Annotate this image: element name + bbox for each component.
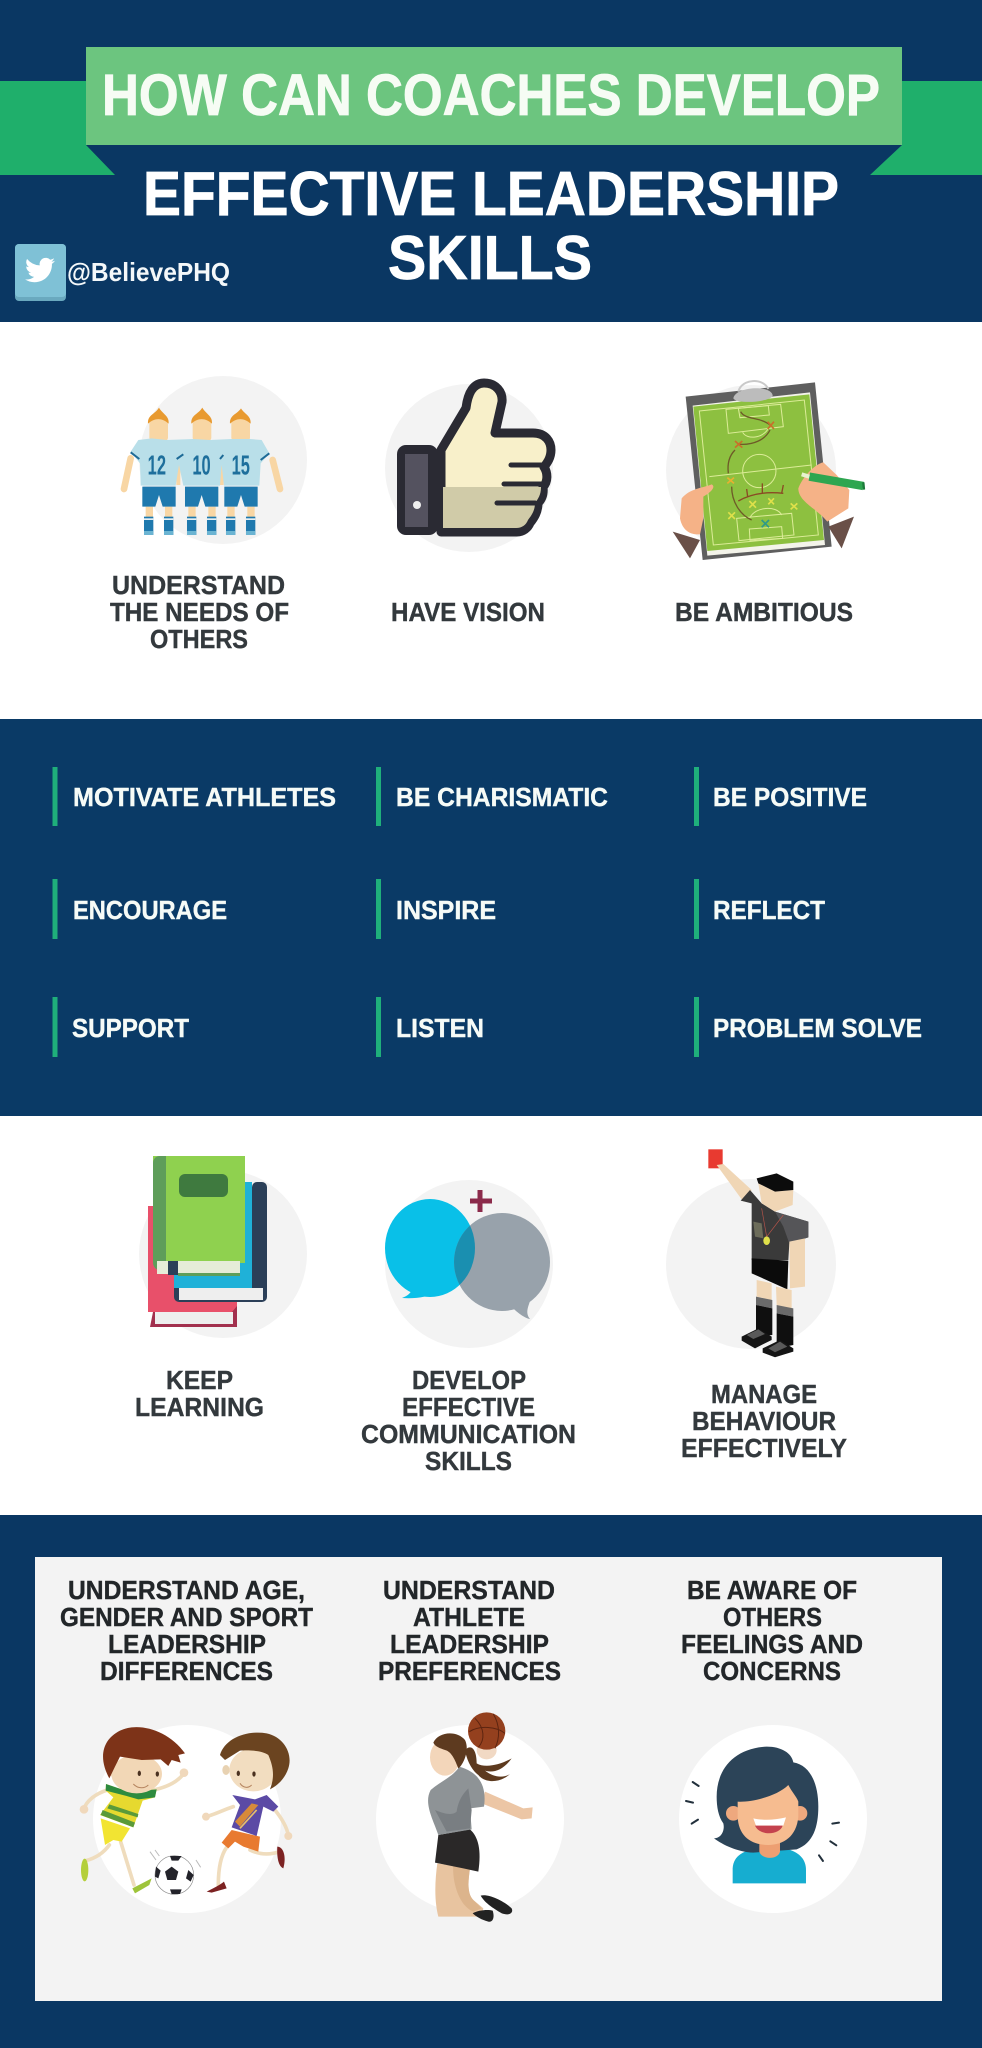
panel: light grey card (35, 1557, 942, 2001)
text: listen: LISTEN (396, 1013, 484, 1043)
text: be positive: BE POSITIVE (713, 782, 867, 812)
icon: thumbs up (385, 383, 553, 552)
label: understand the needs of others: THE NEEDS OF (110, 597, 289, 627)
title: EFFECTIVE LEADERSHIP (143, 160, 839, 229)
title: HOW CAN COACHES DEVELOP (102, 63, 880, 128)
label: manage behaviour effectively: EFFECTIVELY (681, 1433, 847, 1463)
icon: smiling woman (679, 1725, 867, 1913)
label: understand age, gender and sport leadership differences (60, 1575, 313, 1686)
text: encourage: ENCOURAGE (73, 895, 227, 925)
label: understand athlete leadership preferences: UNDERSTAND (383, 1575, 555, 1605)
label: understand athlete leadership preferences: LEADERSHIP (390, 1629, 549, 1659)
icon: speech bubbles (385, 1180, 553, 1348)
ribbon: title banner (86, 47, 902, 145)
icon: stack of books (139, 1156, 307, 1338)
label: develop effective communication skills: COMMUNICATION (361, 1419, 576, 1449)
icon: girl with basketball (376, 1712, 564, 1922)
ribbon: green side tails (0, 81, 982, 175)
column accent bars (52, 767, 699, 1057)
label: develop effective communication skills: EFFECTIVE (402, 1392, 535, 1422)
label: develop effective communication skills (361, 1365, 576, 1476)
label: develop effective communication skills: DEVELOP (412, 1365, 526, 1395)
text: inspire: INSPIRE (396, 895, 496, 925)
text: be charismatic: BE CHARISMATIC (396, 782, 608, 812)
label: develop effective communication skills: SKILLS (425, 1446, 512, 1476)
panel: top skills (0, 322, 982, 719)
twitter handle: @BelievePHQ (67, 257, 230, 287)
label: keep learning: LEARNING (135, 1392, 264, 1422)
label: understand the needs of others (110, 570, 289, 654)
label: be ambitious: BE AMBITIOUS (675, 597, 853, 627)
label: understand athlete leadership preferences: PREFERENCES (378, 1656, 561, 1686)
icon: tactics board (666, 381, 864, 560)
icon: two boys playing football (80, 1725, 292, 1913)
panel: bottom skills (0, 1515, 982, 2048)
label: keep learning: KEEP (166, 1365, 233, 1395)
title: SKILLS (388, 224, 592, 293)
icon: team of players: 12 (148, 449, 166, 480)
icon: team of players: 15 (232, 449, 250, 480)
label: be aware of others feelings and concerns: OTHERS (723, 1602, 822, 1632)
label: keep learning (135, 1365, 264, 1422)
label: manage behaviour effectively (681, 1379, 847, 1463)
label: manage behaviour effectively: BEHAVIOUR (692, 1406, 836, 1436)
label: understand athlete leadership preferences: ATHLETE (413, 1602, 525, 1632)
text: support: SUPPORT (72, 1013, 189, 1043)
label: understand the needs of others: UNDERSTAND (112, 570, 285, 600)
icon: twitter (15, 244, 66, 301)
label: understand age, gender and sport leadership differences: DIFFERENCES (100, 1656, 273, 1686)
panel: middle skills (136, 1149, 847, 1470)
label: understand age, gender and sport leadership differences: GENDER AND SPORT (60, 1602, 313, 1632)
icon: referee with red card (666, 1149, 836, 1357)
label: understand the needs of others: OTHERS (150, 624, 248, 654)
label: be aware of others feelings and concerns (681, 1575, 863, 1686)
panel: attributes list (0, 719, 982, 1116)
icon: team of players: 10 (192, 449, 211, 480)
label: understand age, gender and sport leadership differences: UNDERSTAND AGE, (68, 1575, 305, 1605)
label: manage behaviour effectively: MANAGE (711, 1379, 817, 1409)
label: have vision: HAVE VISION (391, 597, 545, 627)
text: problem solve: PROBLEM SOLVE (713, 1013, 922, 1043)
text: reflect: REFLECT (713, 895, 825, 925)
label: understand athlete leadership preferences (378, 1575, 561, 1686)
title (102, 63, 880, 293)
panel: header (0, 0, 982, 322)
label: be aware of others feelings and concerns: CONCERNS (703, 1656, 841, 1686)
text: motivate athletes: MOTIVATE ATHLETES (73, 782, 336, 812)
label: be aware of others feelings and concerns: BE AWARE OF (687, 1575, 857, 1605)
label: understand age, gender and sport leadership differences: LEADERSHIP (108, 1629, 266, 1659)
label: be aware of others feelings and concerns: FEELINGS AND (681, 1629, 863, 1659)
icon: team of players (124, 376, 307, 544)
